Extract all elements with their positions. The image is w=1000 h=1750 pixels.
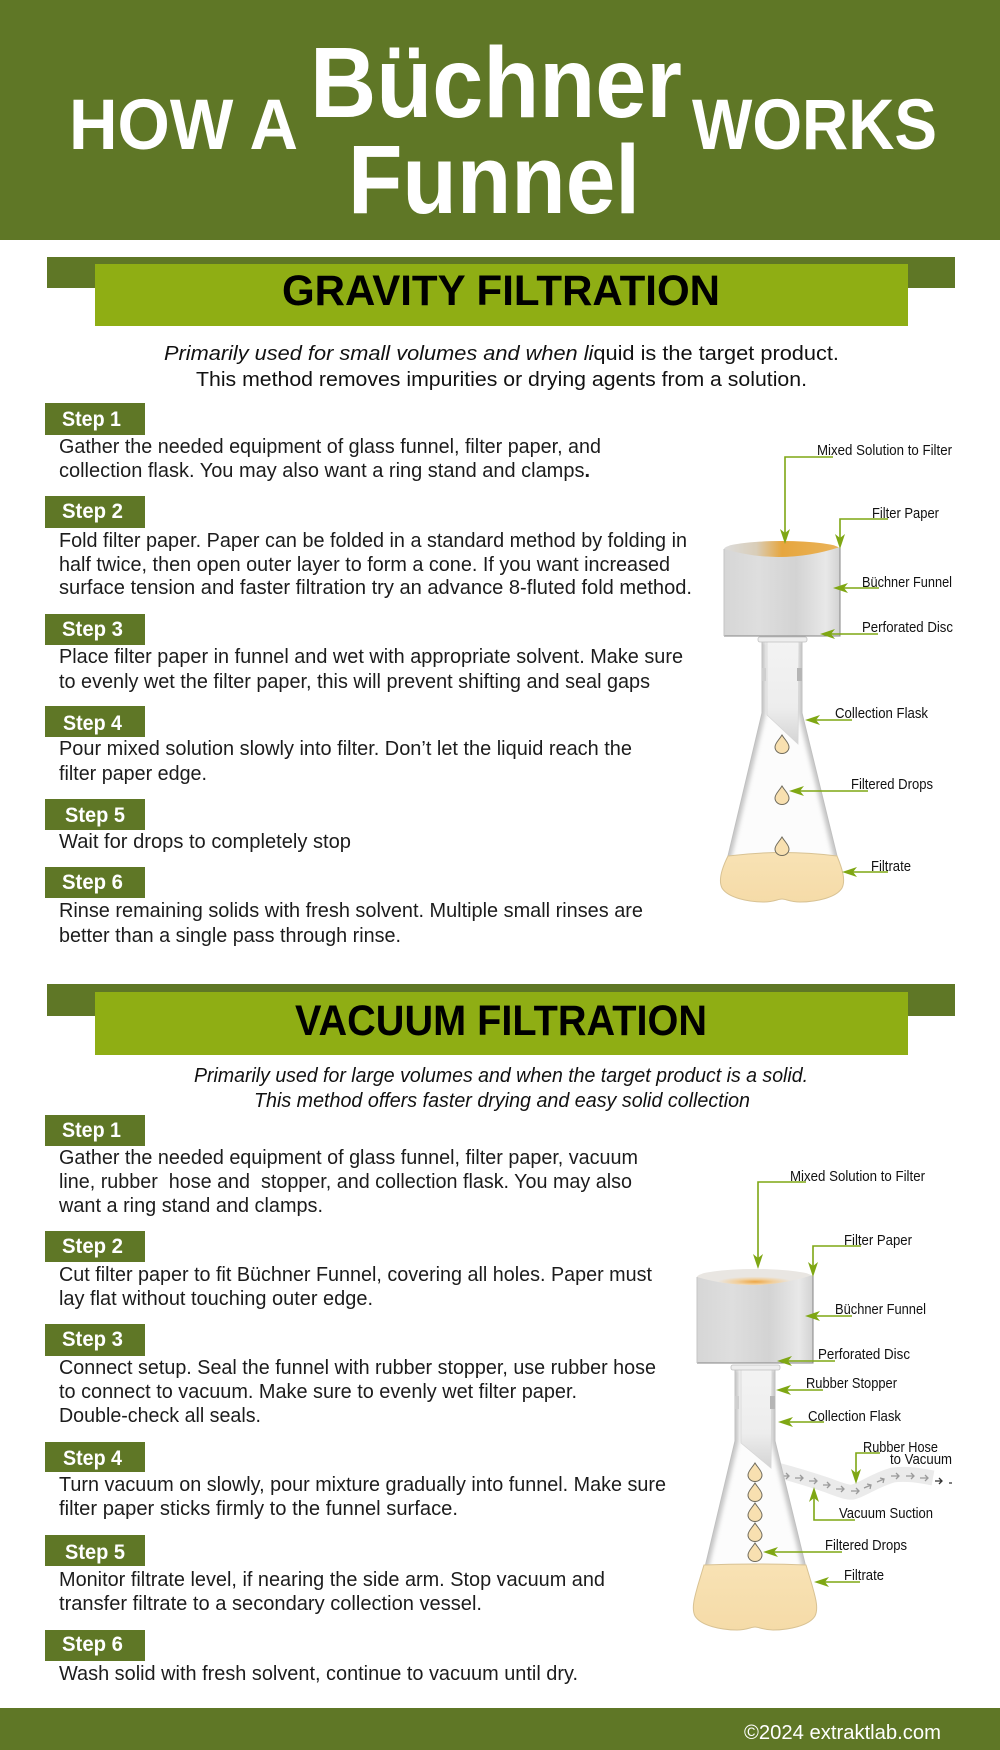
gravity step 4: Step 4 [63, 711, 122, 735]
funnel interior [697, 1269, 813, 1285]
stopper bands [735, 1396, 775, 1409]
gravity step 6: Step 6 [62, 870, 123, 894]
gravity step 5 [45, 799, 351, 853]
funnel body [724, 547, 840, 636]
gravity filtration apparatus [720, 541, 844, 902]
callout: rubber stopper [776, 1376, 897, 1395]
callout: perforated disc [777, 1347, 910, 1366]
callout: filtered drops: Filtered Drops [825, 1538, 907, 1554]
title banner: Büchner [310, 27, 682, 139]
vacuum step 6: Wash solid with fresh solvent, continue to vacuum until dry. [59, 1663, 578, 1685]
vacuum step 3: Connect setup. Seal the funnel with rubber stopper, use rubber hose [59, 1357, 656, 1379]
vacuum filtration apparatus [693, 1269, 952, 1630]
callout: filtered drops [789, 777, 933, 796]
funnel stem [741, 1369, 772, 1468]
callout: filtered drops: Filtered Drops [851, 777, 933, 793]
title banner: HOW A [69, 86, 298, 165]
gravity step 1: Gather the needed equipment of glass funnel, filter paper, and [59, 436, 601, 458]
gravity step 6 [45, 867, 643, 947]
callout: rubber hose: Rubber Hose [863, 1440, 938, 1456]
vacuum step 2: Step 2 [62, 1234, 123, 1258]
vacuum step 5 [45, 1535, 605, 1615]
gravity step 2: half twice, then open outer layer to form a cone. If you want increased [59, 554, 670, 576]
vacuum step 1: Step 1 [62, 1118, 121, 1142]
gravity step 2: surface tension and faster filtration try an advance 8-fluted fold method. [59, 577, 692, 599]
vacuum step 4: filter paper sticks firmly to the funnel surface. [59, 1498, 458, 1520]
callout: collection flask [778, 1409, 902, 1427]
vacuum intro text: Primarily used for large volumes and when the target product is a solid. [194, 1064, 808, 1087]
callout: filtrate: Filtrate [871, 859, 911, 875]
funnel interior [724, 541, 840, 557]
gravity step 5: Step 5 [65, 803, 125, 827]
funnel body [697, 1275, 813, 1363]
rubber hose [771, 1470, 952, 1494]
gravity step 6: better than a single pass through rinse. [59, 925, 401, 947]
flask glass [705, 1370, 806, 1564]
callout: buchner funnel [833, 575, 952, 593]
callout: mixed solution: Mixed Solution to Filter [790, 1169, 925, 1185]
callout: filter paper [808, 1233, 912, 1277]
section heading: vacuum filtration [47, 984, 955, 1055]
callout: buchner funnel: Büchner Funnel [862, 575, 952, 591]
callout: collection flask [805, 706, 929, 725]
vacuum intro text [194, 1064, 808, 1112]
vacuum step 5: transfer filtrate to a secondary collection vessel. [59, 1593, 482, 1615]
funnel edges [724, 547, 840, 636]
filtrate liquid [720, 852, 844, 902]
flask lip [731, 1365, 780, 1370]
vacuum step 3 [45, 1324, 656, 1427]
footer: ©2024 extraktlab.com [744, 1722, 941, 1744]
callout: filter paper: Filter Paper [872, 506, 939, 522]
gravity step 3: to evenly wet the filter paper, this will prevent shifting and seal gaps [59, 671, 650, 693]
vacuum step 2: lay flat without touching outer edge. [59, 1288, 373, 1310]
vacuum step 1: want a ring stand and clamps. [58, 1195, 323, 1217]
gravity step 3: Step 3 [62, 617, 123, 641]
vacuum step 4: Turn vacuum on slowly, pour mixture gradually into funnel. Make sure [59, 1474, 666, 1496]
gravity step 6: Rinse remaining solids with fresh solvent. Multiple small rinses are [59, 900, 643, 922]
gravity step 1 [45, 403, 601, 482]
title banner: Funnel [348, 125, 640, 234]
callout: perforated disc: Perforated Disc [818, 1347, 910, 1363]
vacuum step 6: Step 6 [62, 1632, 123, 1656]
vacuum step 1 [45, 1115, 638, 1217]
section heading: gravity filtration: GRAVITY FILTRATION [282, 267, 720, 315]
vacuum step 2: Cut filter paper to fit Büchner Funnel, covering all holes. Paper must [59, 1264, 652, 1286]
vacuum step 1: Gather the needed equipment of glass funnel, filter paper, vacuum [59, 1147, 638, 1169]
callout: filtrate [842, 859, 911, 877]
gravity step 1: collection flask. You may also want a ring stand and clamps. [59, 460, 590, 482]
vacuum step 5: Step 5 [65, 1540, 125, 1564]
gravity step 4: filter paper edge. [59, 763, 207, 785]
callout: mixed solution: Mixed Solution to Filter [817, 443, 952, 459]
gravity intro text: Primarily used for small volumes and when li quid is the target product. [164, 342, 839, 365]
vacuum step 2 [45, 1231, 652, 1310]
section heading: gravity filtration [47, 257, 955, 326]
callout: perforated disc: Perforated Disc [862, 620, 953, 636]
callout: filter paper: Filter Paper [844, 1233, 912, 1249]
filtrate liquid [693, 1564, 817, 1630]
filtered drops [775, 735, 789, 856]
vacuum step 3: Step 3 [62, 1327, 123, 1351]
flask lip [758, 637, 807, 642]
callout: collection flask: Collection Flask [835, 706, 929, 722]
gravity step 1: Step 1 [62, 407, 121, 431]
gravity intro text: This method removes impurities or drying agents from a solution. [196, 368, 807, 391]
filtered drops [748, 1463, 762, 1562]
vacuum intro text: This method offers faster drying and easy solid collection [254, 1089, 750, 1112]
title banner [0, 0, 1000, 240]
gravity step 5: Wait for drops to completely stop [59, 831, 351, 853]
vacuum step 1: line, rubber hose and stopper, and collection flask. You may also [59, 1171, 632, 1193]
stopper bands [762, 668, 802, 681]
vacuum step 3: Double-check all seals. [59, 1405, 261, 1427]
callout: vacuum suction [809, 1487, 933, 1522]
vacuum step 4 [45, 1442, 666, 1520]
callout: buchner funnel: Büchner Funnel [835, 1302, 926, 1318]
callout: rubber hose [851, 1440, 952, 1484]
gravity step 2: Step 2 [62, 499, 123, 523]
callout: filtrate: Filtrate [844, 1568, 884, 1584]
flask glass [728, 642, 838, 856]
section heading: vacuum filtration: VACUUM FILTRATION [295, 997, 707, 1045]
gravity step 4 [45, 706, 632, 785]
gravity step 3: Place filter paper in funnel and wet with appropriate solvent. Make sure [59, 646, 683, 668]
gravity step 2 [45, 496, 692, 599]
gravity step 4: Pour mixed solution slowly into filter. Don’t let the liquid reach the [59, 738, 632, 760]
callout: collection flask: Collection Flask [808, 1409, 902, 1425]
callout: rubber hose: to Vacuum [890, 1452, 952, 1468]
title banner: WORKS [692, 86, 937, 165]
callout: rubber stopper: Rubber Stopper [806, 1376, 897, 1392]
vacuum step 4: Step 4 [63, 1446, 122, 1470]
funnel edges [697, 1275, 813, 1363]
callout: mixed solution [753, 1169, 925, 1269]
vacuum step 6 [45, 1630, 578, 1685]
callout: filtered drops [763, 1538, 907, 1557]
gravity step 2: Fold filter paper. Paper can be folded in a standard method by folding in [59, 530, 687, 552]
footer [0, 1708, 1000, 1750]
callout: buchner funnel [805, 1302, 926, 1321]
gravity intro text [164, 342, 839, 391]
funnel stem [767, 641, 799, 744]
callout: perforated disc [820, 620, 953, 639]
vacuum step 3: to connect to vacuum. Make sure to evenly wet filter paper. [59, 1381, 577, 1403]
callout: mixed solution [780, 443, 952, 544]
callout: vacuum suction: Vacuum Suction [839, 1506, 933, 1522]
callout: filter paper [835, 506, 939, 549]
vacuum step 5: Monitor filtrate level, if nearing the side arm. Stop vacuum and [59, 1569, 605, 1591]
callout: filtrate [814, 1568, 884, 1587]
gravity step 3 [45, 614, 683, 693]
